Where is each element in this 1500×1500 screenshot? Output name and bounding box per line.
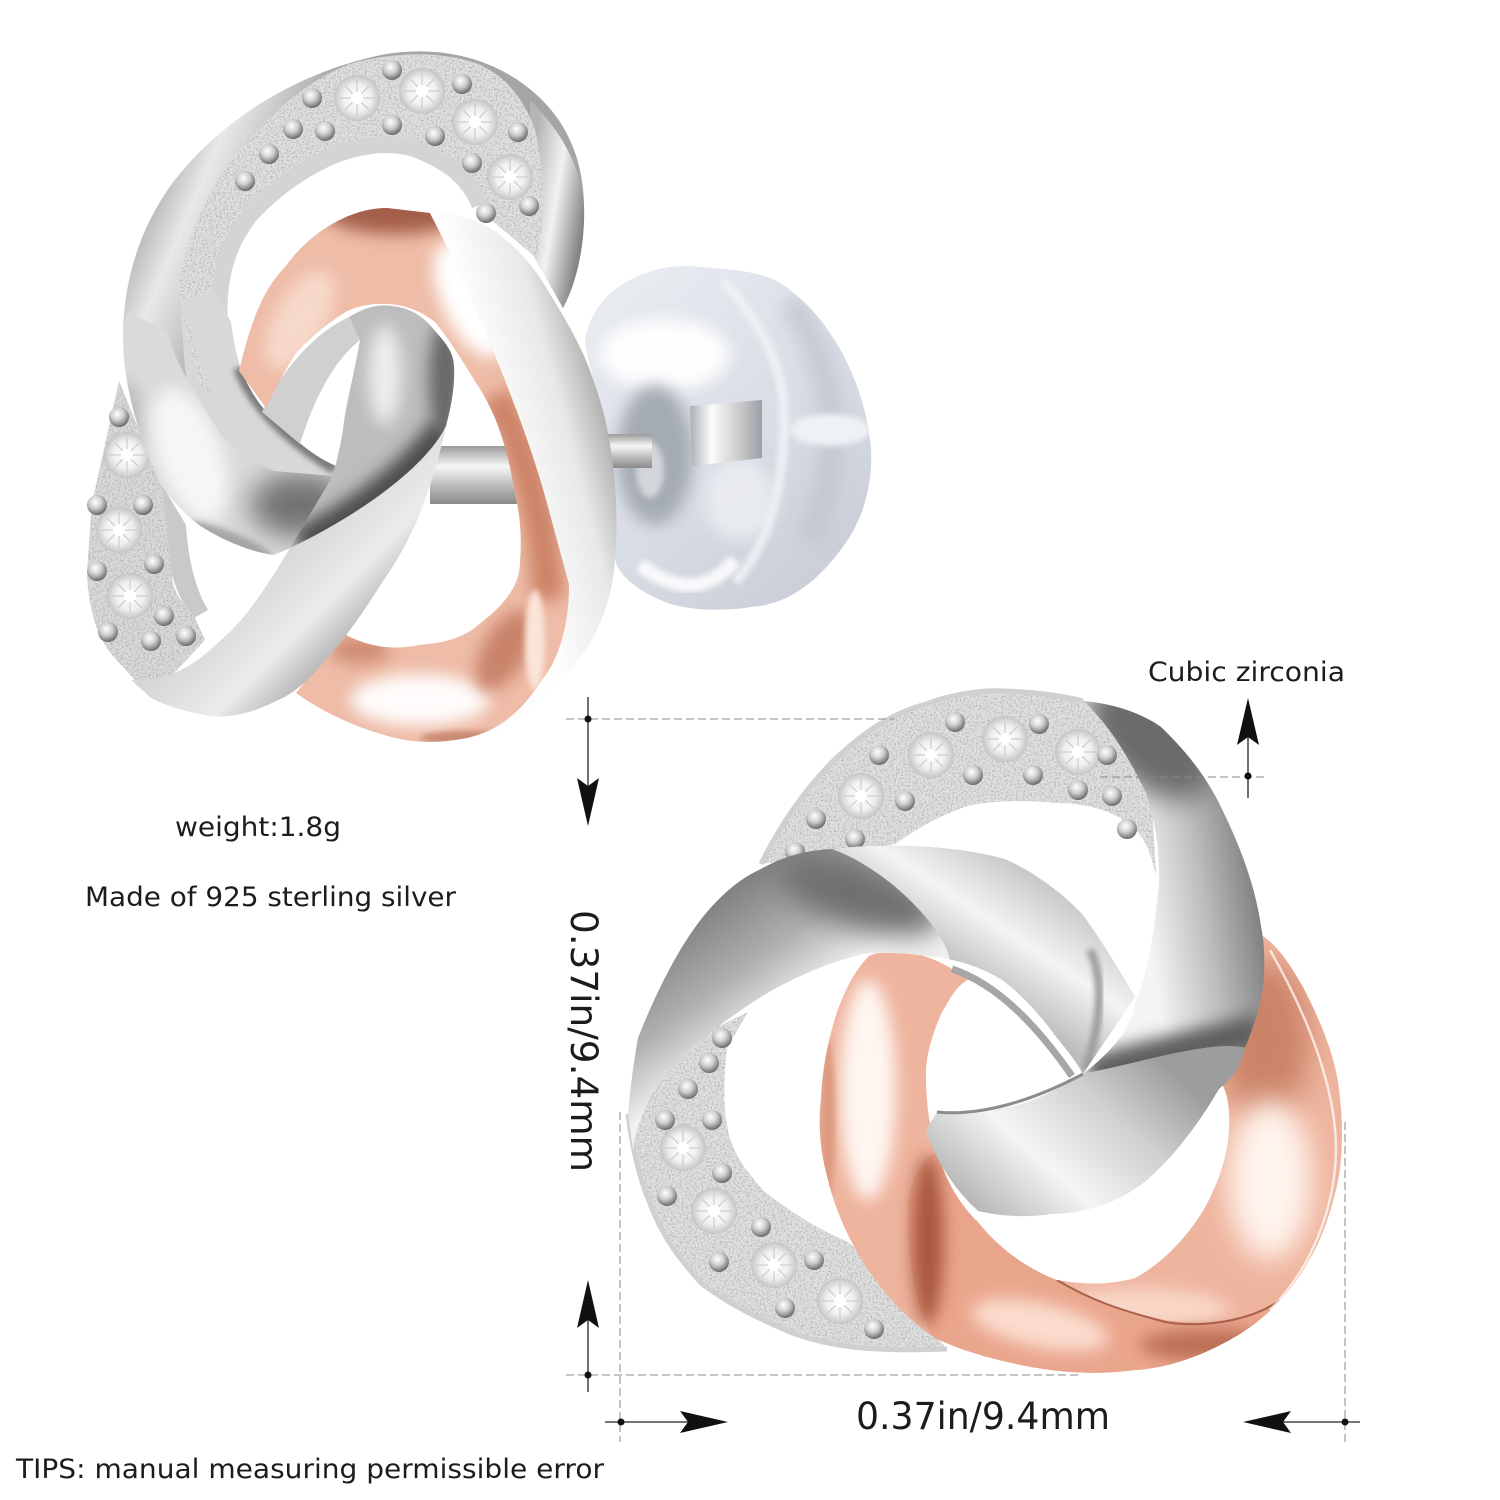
tips note: TIPS: manual measuring permissible error — [15, 1454, 605, 1485]
label: weight: weight:1.8g — [175, 812, 341, 843]
frosted pave band — [180, 54, 543, 396]
stones: top loop — [235, 60, 539, 223]
stone band: lower left — [628, 1012, 947, 1352]
top loop with stones — [123, 51, 584, 482]
label: cubic zirconia: Cubic zirconia — [1148, 657, 1345, 688]
thin silver strand behind centre — [262, 317, 360, 444]
rose left highlight — [840, 980, 896, 1200]
post — [430, 434, 655, 504]
silver crescent front ring — [430, 213, 616, 738]
rose right shading — [1220, 960, 1310, 1120]
silicone back — [585, 266, 871, 610]
label: vertical dimension: 0.37in/9.4mm — [562, 910, 605, 1172]
label: horizontal dimension: 0.37in/9.4mm — [856, 1395, 1110, 1438]
prongs at tip of band — [176, 626, 196, 646]
rose gold loop — [820, 936, 1342, 1385]
arrow: height bottom — [577, 1280, 599, 1392]
lip strand into centre — [181, 291, 336, 476]
stone band: upper — [761, 691, 1156, 875]
inner lip — [219, 144, 480, 345]
arrow: width left — [605, 1411, 728, 1433]
stones band: left — [87, 381, 205, 698]
arrow: cubic zirconia — [1237, 698, 1259, 798]
earring side view — [87, 51, 871, 745]
rose gold loop — [239, 190, 569, 745]
earring front view — [628, 657, 1342, 1385]
rose lower strand — [907, 1150, 1280, 1385]
rose outer rim — [1270, 950, 1336, 1310]
arrow: height top — [577, 697, 599, 826]
silver strand left — [628, 838, 1135, 1150]
thin left strand — [162, 485, 208, 618]
silver left strand — [124, 318, 333, 555]
inner lip of left strand — [952, 969, 1072, 1076]
silver strand right — [926, 657, 1264, 1216]
arrow: width right — [1243, 1411, 1360, 1433]
label: material: Made of 925 sterling silver — [85, 882, 457, 913]
dimension lines — [566, 719, 1345, 1442]
silver front strand — [131, 305, 461, 716]
